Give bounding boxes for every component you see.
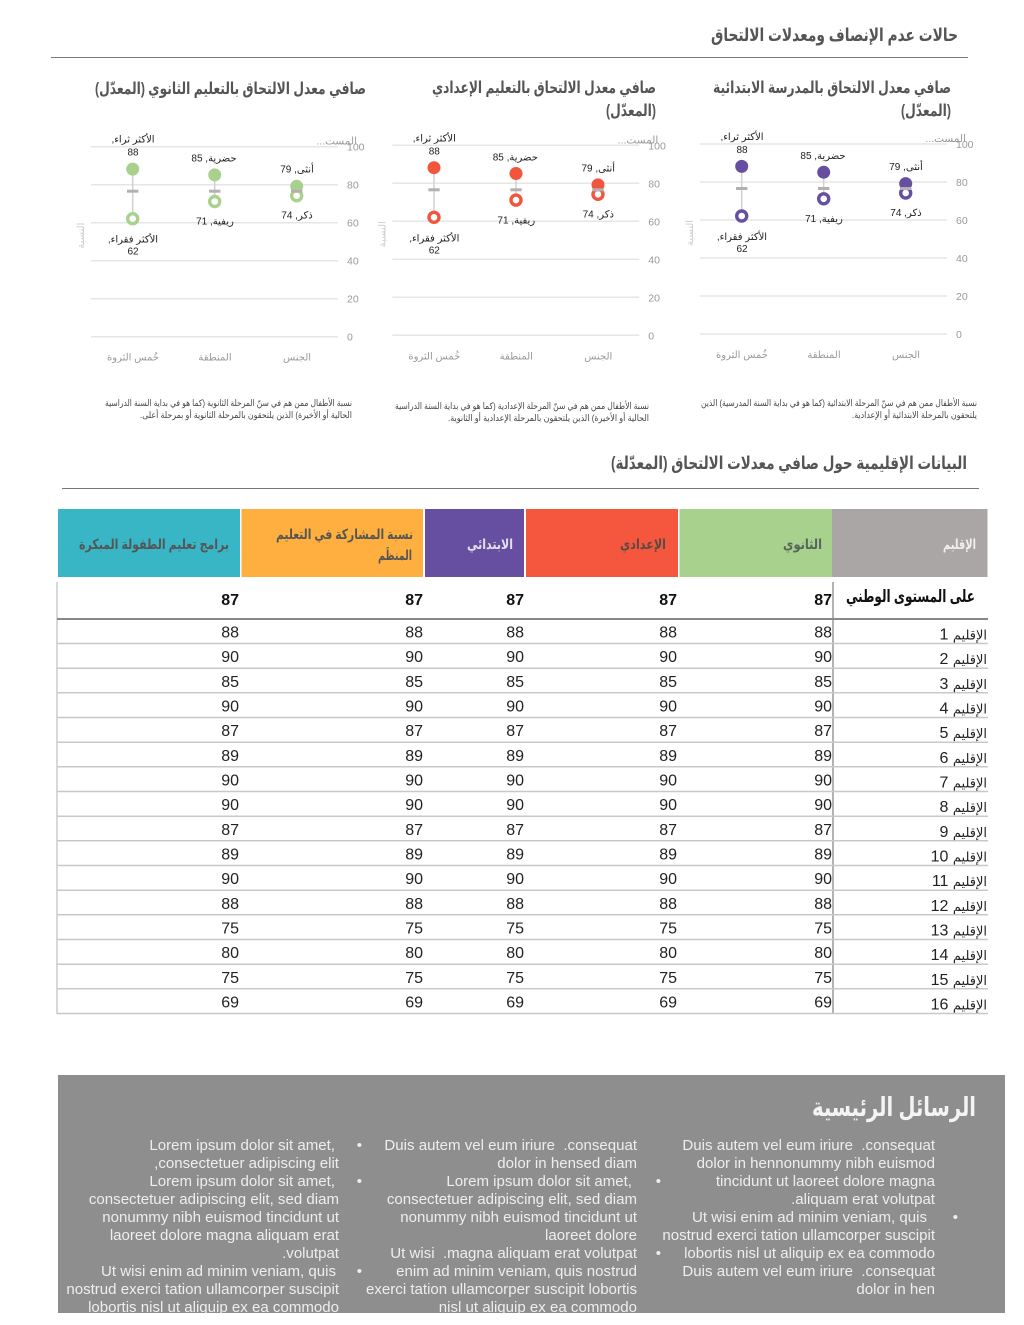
row: region 5: 87 xyxy=(814,723,832,740)
text column 2: nisl ut aliquip ex ea commodo xyxy=(439,1299,637,1316)
row: region 12 xyxy=(221,896,987,915)
chart: lower secondary: الجنس xyxy=(584,351,612,362)
row: region 8: 90 xyxy=(659,797,677,814)
row: region 2 xyxy=(221,649,987,668)
row: region 9: 87 xyxy=(659,822,677,839)
row: region 3: 85 xyxy=(405,674,423,691)
text column 3: nostrud exerci tation ullamcorper suscipit xyxy=(66,1281,340,1298)
chart: upper secondary: ذكر, 74 xyxy=(281,211,313,222)
text column 1: • xyxy=(656,1245,661,1262)
row: region 6 xyxy=(221,748,987,767)
chart: upper secondary: خُمس الثروة xyxy=(107,352,159,364)
row: region 6: 89 xyxy=(814,748,832,765)
chart: upper secondary: 0 xyxy=(347,332,353,344)
text column 3: nonummy nibh euismod tincidunt ut xyxy=(102,1209,340,1226)
row: region 3: 85 xyxy=(506,674,524,691)
row: region 7: الإقليم 7 xyxy=(940,774,987,792)
row: region 5: 87 xyxy=(405,723,423,740)
row: region 7: 90 xyxy=(814,772,832,790)
caption: primary: نسبة الأطفال ممن هم في سنّ المرحلة الابتدائية (كما هو في بداية السنة المدرسية) الذين xyxy=(701,397,977,409)
row: region 14: 80 xyxy=(405,945,423,962)
row: national: 87 xyxy=(659,592,677,609)
heading: lower secondary chart: (المعدّل) xyxy=(606,102,656,120)
chart: upper secondary: النسبة xyxy=(76,223,87,249)
row: region 6: الإقليم 6 xyxy=(940,750,987,767)
table header: المنظَم xyxy=(378,546,412,563)
chart: lower secondary: النسبة xyxy=(377,221,388,247)
chart: lower secondary: 40 xyxy=(648,254,660,266)
chart: primary: الأكثر فقراء, xyxy=(717,230,767,243)
text column 1: .aliquam erat volutpat xyxy=(791,1191,936,1208)
row: region 9 xyxy=(221,822,987,841)
row: region 16 xyxy=(221,994,987,1014)
chart: primary: المنطقة xyxy=(807,350,841,361)
row: region 5 xyxy=(221,723,987,742)
row: region 14: 80 xyxy=(506,945,524,962)
chart: upper secondary: 20 xyxy=(347,294,359,306)
chart: primary: 40 xyxy=(956,253,968,265)
row: region 11: الإقليم 11 xyxy=(932,873,987,890)
chart: lower secondary: 60 xyxy=(648,216,660,228)
row: region 5: 87 xyxy=(659,723,677,740)
text column 3: ,consectetuer adipiscing elit xyxy=(154,1155,340,1172)
row: region 5: الإقليم 5 xyxy=(940,725,987,742)
chart: lower secondary: حضرية, 85 xyxy=(493,152,538,163)
row: region 13 xyxy=(221,920,987,940)
heading: lower secondary chart: صافي معدل الالتحاق بالتعليم الإعدادي xyxy=(432,79,656,98)
text column 1: dolor in hennonummy nibh euismod xyxy=(697,1155,935,1172)
row: region 14: 80 xyxy=(221,945,239,962)
row: region 10: 89 xyxy=(506,846,524,864)
chart: primary xyxy=(685,130,974,361)
row: region 4: 90 xyxy=(405,698,423,716)
chart: primary: الجنس xyxy=(892,350,920,361)
row: region 8: 90 xyxy=(221,797,239,814)
row: region 10 xyxy=(221,846,987,866)
row: region 12: 88 xyxy=(814,896,832,913)
text column 3: Lorem ipsum dolor sit amet, xyxy=(149,1137,335,1154)
chart: primary: 0 xyxy=(956,329,962,341)
chart: upper secondary: ريفية, 71 xyxy=(196,217,234,228)
chart: upper secondary: المست... xyxy=(316,136,357,148)
row: region 2: 90 xyxy=(221,649,239,666)
row: region 10: 89 xyxy=(221,846,239,864)
row: region 16: 69 xyxy=(506,994,524,1012)
chart: primary: أنثى, 79 xyxy=(889,160,923,173)
heading: lower secondary chart xyxy=(432,79,656,120)
text column 3: laoreet dolore magna aliquam erat xyxy=(110,1227,340,1244)
row: region 16: 69 xyxy=(221,994,239,1012)
chart: lower secondary: أنثى, 79 xyxy=(581,161,615,174)
row: region 15: 75 xyxy=(814,970,832,987)
row: region 2: 90 xyxy=(814,649,832,666)
row: region 13: 75 xyxy=(221,920,239,938)
row: region 7: 90 xyxy=(221,772,239,790)
row: region 12: 88 xyxy=(659,896,677,913)
text column 2: • xyxy=(357,1263,362,1280)
chart: upper secondary: أنثى, 79 xyxy=(280,163,314,176)
table header: نسبة المشاركة في التعليم xyxy=(276,526,413,543)
heading: primary chart: صافي معدل الالتحاق بالمدرسة الابتدائية xyxy=(713,79,951,98)
text column 1 xyxy=(656,1137,958,1298)
row: region 11: 90 xyxy=(506,871,524,888)
chart: primary: 62 xyxy=(736,244,748,255)
text column 2: consectetuer adipiscing elit, sed diam xyxy=(387,1191,637,1208)
row: region 10: 89 xyxy=(659,846,677,864)
row: region 16: 69 xyxy=(659,994,677,1012)
row: region 15 xyxy=(221,970,987,989)
panel: key messages xyxy=(58,1075,1005,1316)
row: region 4 xyxy=(221,698,987,718)
row: region 8: 90 xyxy=(506,797,524,814)
row: region 10: 89 xyxy=(405,846,423,864)
text column 3: lobortis nisl ut aliquip ex ea commodo xyxy=(88,1299,339,1316)
row: region 9: الإقليم 9 xyxy=(940,824,987,841)
row: region 6: 89 xyxy=(506,748,524,765)
chart: upper secondary: الجنس xyxy=(283,353,311,364)
text column 1: Duis autem vel eum iriure .consequat xyxy=(682,1263,936,1280)
caption: lower secondary xyxy=(395,400,649,424)
text column 2: Duis autem vel eum iriure .consequat xyxy=(384,1137,638,1154)
row: national: 87 xyxy=(405,592,423,609)
row: region 13: 75 xyxy=(506,920,524,938)
row: national: 87 xyxy=(221,592,239,609)
row: region 2: 90 xyxy=(506,649,524,666)
row: region 15: 75 xyxy=(506,970,524,987)
text column 3: Ut wisi enim ad minim veniam, quis xyxy=(101,1263,336,1280)
row: region 14 xyxy=(221,945,987,964)
row: region 1: 88 xyxy=(659,624,677,642)
text column 3 xyxy=(66,1137,340,1316)
text column 2: enim ad minim veniam, quis nostrud xyxy=(396,1263,637,1280)
row: region 8: الإقليم 8 xyxy=(940,799,987,816)
chart: lower secondary: ريفية, 71 xyxy=(497,215,535,226)
chart: upper secondary: حضرية, 85 xyxy=(191,154,237,165)
table header xyxy=(58,509,988,577)
table xyxy=(57,509,988,1014)
text column 3: .volutpat xyxy=(282,1245,340,1262)
chart: lower secondary: 0 xyxy=(648,330,654,342)
row: region 14: الإقليم 14 xyxy=(931,947,987,964)
text column 2: dolor in hensed diam xyxy=(497,1155,637,1172)
row: region 15: 75 xyxy=(659,970,677,987)
row: region 15: الإقليم 15 xyxy=(931,972,987,989)
chart: primary: ريفية, 71 xyxy=(805,214,843,225)
text column 2: • xyxy=(357,1173,362,1190)
row: region 3: الإقليم 3 xyxy=(940,676,987,693)
row: national xyxy=(221,587,975,609)
chart: primary: 88 xyxy=(736,145,748,156)
row: region 8: 90 xyxy=(814,797,832,814)
row: region 6: 89 xyxy=(221,748,239,765)
row: region 1: 88 xyxy=(221,624,239,642)
chart: upper secondary: 80 xyxy=(347,180,359,192)
row: region 10: الإقليم 10 xyxy=(931,848,987,866)
text column 1: Duis autem vel eum iriure .consequat xyxy=(682,1137,936,1154)
row: region 15: 75 xyxy=(221,970,239,987)
text column 1: Ut wisi enim ad minim veniam, quis xyxy=(692,1209,927,1226)
row: region 11: 90 xyxy=(405,871,423,888)
chart: lower secondary: 62 xyxy=(429,245,440,256)
row: region 7: 90 xyxy=(506,772,524,790)
row: region 1: الإقليم 1 xyxy=(940,626,987,644)
chart: primary: المست... xyxy=(925,133,966,145)
table header: الابتدائي xyxy=(467,536,513,553)
chart: upper secondary: 100 xyxy=(347,142,365,154)
row: region 3: 85 xyxy=(221,674,239,691)
row: region 6: 89 xyxy=(405,748,423,765)
row: region 12: الإقليم 12 xyxy=(931,898,987,915)
row: region 4: 90 xyxy=(506,698,524,716)
row: region 8 xyxy=(221,797,987,816)
table header: الإقليم xyxy=(943,536,976,553)
chart: upper secondary xyxy=(76,133,365,364)
text column 2 xyxy=(357,1137,638,1316)
chart: primary: الأكثر ثراء, xyxy=(720,130,764,143)
row: region 2: 90 xyxy=(405,649,423,666)
table header: الثانوي xyxy=(783,536,822,554)
row: region 6: 89 xyxy=(659,748,677,765)
chart: upper secondary: 60 xyxy=(347,218,359,230)
text column 3: Lorem ipsum dolor sit amet, xyxy=(149,1173,335,1190)
chart: primary: 20 xyxy=(956,291,968,303)
text column 2: Lorem ipsum dolor sit amet, xyxy=(446,1173,632,1190)
caption: upper secondary xyxy=(105,397,352,420)
row: region 5: 87 xyxy=(506,723,524,740)
row: region 11 xyxy=(221,871,987,890)
chart: lower secondary: خُمس الثروة xyxy=(408,351,460,362)
caption: upper secondary: الحالية أو الأخيرة) الذين يلتحقون بالمرحلة الثانوية أو بمرحلة أعلى. xyxy=(140,409,352,420)
chart: lower secondary: ذكر, 74 xyxy=(583,209,614,220)
text column 1: • xyxy=(656,1173,661,1190)
heading: primary chart: (المعدّل) xyxy=(901,102,951,120)
row: region 1 xyxy=(221,624,987,644)
row: region 1: 88 xyxy=(814,624,832,642)
chart: upper secondary: الأكثر فقراء, xyxy=(108,233,158,246)
table header: الإعدادي xyxy=(620,536,666,554)
heading: key messages: الرسائل الرئيسية xyxy=(812,1092,976,1123)
text column 2: Ut wisi .magna aliquam erat volutpat xyxy=(390,1245,638,1262)
chart: primary: 80 xyxy=(956,177,968,189)
caption: primary xyxy=(701,397,977,421)
row: region 4: 90 xyxy=(221,698,239,716)
row: region 9: 87 xyxy=(405,822,423,839)
chart: lower secondary: المست... xyxy=(618,134,658,146)
chart: primary: حضرية, 85 xyxy=(800,151,846,162)
chart: lower secondary xyxy=(377,131,666,362)
row: region 4: الإقليم 4 xyxy=(940,700,987,718)
heading: primary chart xyxy=(713,79,951,120)
chart: lower secondary: 20 xyxy=(648,292,660,304)
row: region 8: 90 xyxy=(405,797,423,814)
text column 1: lobortis nisl ut aliquip ex ea commodo xyxy=(684,1245,935,1262)
text column 2: nonummy nibh euismod tincidunt ut xyxy=(400,1209,638,1226)
row: region 7: 90 xyxy=(659,772,677,790)
row: region 15: 75 xyxy=(405,970,423,987)
chart: primary: ذكر, 74 xyxy=(890,208,922,219)
text column 1: • xyxy=(953,1209,958,1226)
text column 2: • xyxy=(357,1137,362,1154)
heading: upper secondary chart: صافي معدل الالتحاق بالتعليم الثانوي (المعدّل) xyxy=(95,80,366,99)
text column 1: tincidunt ut laoreet dolore magna xyxy=(716,1173,936,1190)
row: region 11: 90 xyxy=(221,871,239,888)
row: region 14: 80 xyxy=(814,945,832,962)
caption: primary: يلتحقون بالمرحلة الابتدائية أو الإعدادية. xyxy=(852,409,977,421)
chart: upper secondary: 62 xyxy=(127,247,139,258)
chart: lower secondary: المنطقة xyxy=(500,351,533,362)
row: region 2: الإقليم 2 xyxy=(940,651,987,668)
row: region 1: 88 xyxy=(506,624,524,642)
chart: upper secondary: 88 xyxy=(127,148,139,159)
row: region 4: 90 xyxy=(814,698,832,716)
row: region 13: 75 xyxy=(659,920,677,938)
row: region 13: الإقليم 13 xyxy=(931,922,987,940)
table header: برامج تعليم الطفولة المبكرة xyxy=(79,536,229,553)
row: national: 87 xyxy=(506,592,524,609)
text column 2: exerci tation ullamcorper suscipit lobortis xyxy=(366,1281,637,1298)
chart: lower secondary: 80 xyxy=(648,178,660,190)
chart: upper secondary: 40 xyxy=(347,256,359,268)
row: region 16: 69 xyxy=(405,994,423,1012)
row: region 12: 88 xyxy=(221,896,239,913)
row: region 16: 69 xyxy=(814,994,832,1012)
chart: primary: 100 xyxy=(956,139,974,151)
row: region 14: 80 xyxy=(659,945,677,962)
row: region 16: الإقليم 16 xyxy=(931,996,987,1014)
chart: lower secondary: الأكثر فقراء, xyxy=(409,231,459,244)
row: region 12: 88 xyxy=(405,896,423,913)
row: national: على المستوى الوطني xyxy=(846,587,975,607)
row: region 3 xyxy=(221,674,987,693)
row: region 9: 87 xyxy=(814,822,832,839)
chart: primary: النسبة xyxy=(685,220,696,246)
chart: primary: 60 xyxy=(956,215,968,227)
row: region 2: 90 xyxy=(659,649,677,666)
text column 1: nostrud exerci tation ullamcorper suscipit xyxy=(662,1227,936,1244)
row: region 3: 85 xyxy=(814,674,832,691)
row: region 7 xyxy=(221,772,987,792)
row: region 9: 87 xyxy=(221,822,239,839)
chart: lower secondary: 100 xyxy=(648,140,666,152)
caption: upper secondary: نسبة الأطفال ممن هم في سنّ المرحلة الثانوية (كما هو في بداية السنة الدراسية xyxy=(105,397,352,409)
chart: lower secondary: 88 xyxy=(429,146,440,157)
row: region 11: 90 xyxy=(814,871,832,888)
row: region 10: 89 xyxy=(814,846,832,864)
row: region 9: 87 xyxy=(506,822,524,839)
row: region 13: 75 xyxy=(814,920,832,938)
row: region 4: 90 xyxy=(659,698,677,716)
chart: upper secondary: الأكثر ثراء, xyxy=(111,133,155,146)
row: region 13: 75 xyxy=(405,920,423,938)
text column 1: dolor in hen xyxy=(856,1281,935,1298)
row: region 1: 88 xyxy=(405,624,423,642)
chart: upper secondary: المنطقة xyxy=(198,353,232,364)
chart: primary: خُمس الثروة xyxy=(716,349,768,361)
text column 3: consectetuer adipiscing elit, sed diam xyxy=(89,1191,339,1208)
row: region 12: 88 xyxy=(506,896,524,913)
row: region 11: 90 xyxy=(659,871,677,888)
chart: lower secondary: الأكثر ثراء, xyxy=(413,131,456,144)
caption: lower secondary: نسبة الأطفال ممن هم في سنّ المرحلة الإعدادية (كما هو في بداية السنة الدراسية xyxy=(395,400,649,412)
row: national: 87 xyxy=(814,592,832,609)
row: region 7: 90 xyxy=(405,772,423,790)
text column 2: laoreet dolore xyxy=(545,1227,637,1244)
row: region 3: 85 xyxy=(659,674,677,691)
row: region 5: 87 xyxy=(221,723,239,740)
caption: lower secondary: الحالية أو الأخيرة) الذين يلتحقون بالمرحلة الإعدادية أو الثانوية. xyxy=(448,412,649,424)
